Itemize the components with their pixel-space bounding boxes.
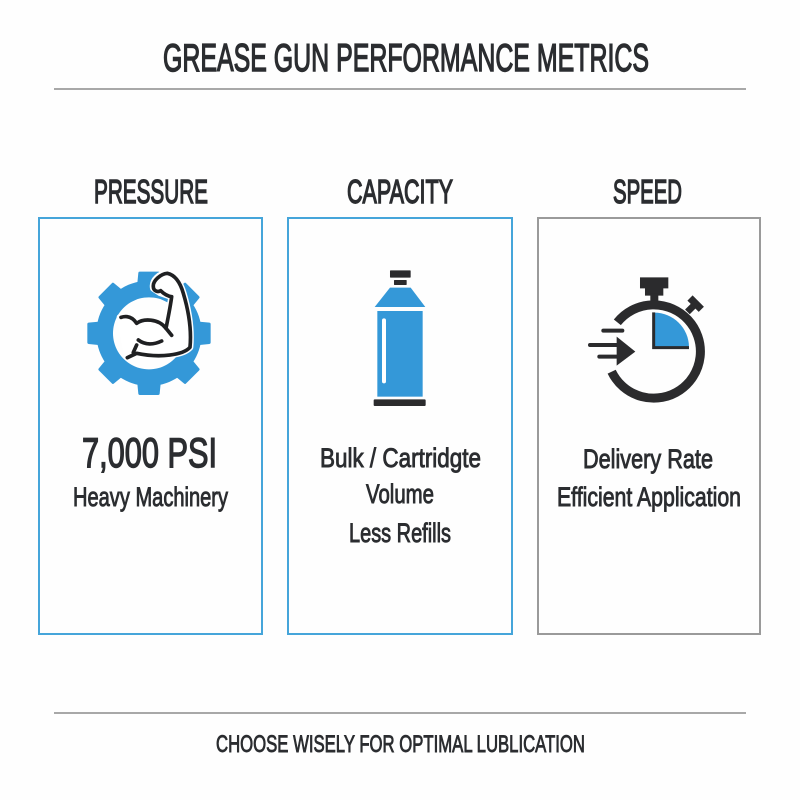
icon: cartridge bottle (374, 270, 426, 406)
text: bulk / cartridge: Bulk / Cartridgte (320, 443, 481, 473)
footer: CHOOSE WISELY FOR OPTIMAL LUBLICATION (216, 731, 585, 758)
heading: speed: SPEED (613, 173, 682, 210)
label: heavy machinery: Heavy Machinery (73, 482, 228, 512)
text: delivery rate: Delivery Rate (583, 444, 713, 474)
text: less refills: Less Refills (349, 518, 451, 548)
panel: speed (538, 218, 760, 634)
icon: gear with flexed arm (89, 273, 209, 394)
heading: capacity: CAPACITY (347, 173, 453, 210)
text: volume: Volume (366, 479, 434, 509)
text: efficient application: Efficient Application (557, 482, 741, 512)
heading: pressure: PRESSURE (94, 173, 208, 210)
metric: 7,000 PSI: 7,000 PSI (82, 429, 217, 476)
panel: capacity (288, 218, 512, 634)
panel: pressure (39, 218, 262, 634)
icon: stopwatch (590, 277, 704, 398)
